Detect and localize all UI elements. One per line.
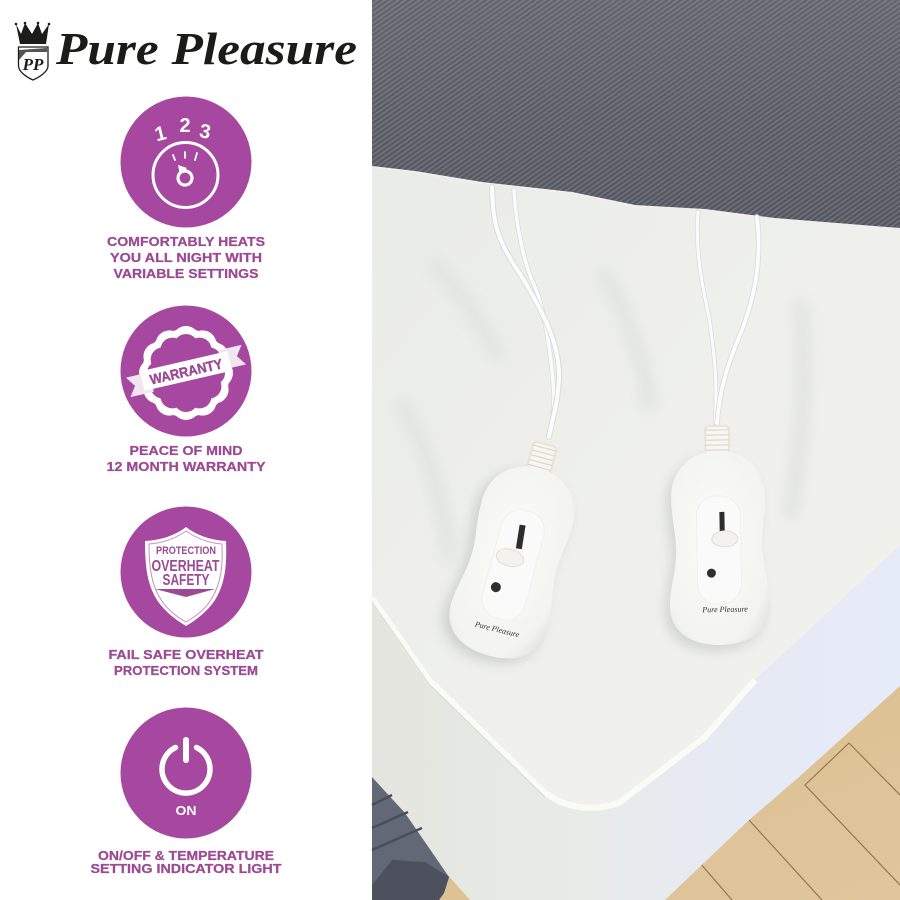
caption: ON/OFF & TEMPERATURE xyxy=(98,848,274,863)
controller logo: Pure Pleasure xyxy=(701,605,748,614)
grey denim blanket xyxy=(372,0,900,229)
feature: variable heat settings xyxy=(107,96,265,281)
feature: overheat protection xyxy=(108,506,264,678)
feature: on/off indicator xyxy=(90,708,282,876)
icon: protection shield: PROTECTION xyxy=(156,545,216,557)
slider slot xyxy=(477,505,549,625)
slider slot xyxy=(696,496,742,604)
caption: FAIL SAFE OVERHEAT xyxy=(108,647,264,662)
icon: warranty seal and ribbon: WARRANTY xyxy=(148,355,225,388)
caption: PROTECTION SYSTEM xyxy=(114,663,258,678)
feature: warranty xyxy=(106,306,266,474)
icon: dial with 1 2 3 settings: 3 xyxy=(198,120,212,144)
caption xyxy=(108,647,264,678)
white heated blanket xyxy=(372,167,900,808)
icon: dial with 1 2 3 settings xyxy=(120,96,252,228)
caption xyxy=(90,848,282,876)
icon: protection shield xyxy=(120,506,252,638)
logo: Pure Pleasure xyxy=(15,22,357,80)
controller cords xyxy=(492,187,759,437)
icon: power button: ON xyxy=(176,803,196,818)
icon: dial with 1 2 3 settings: 1 xyxy=(152,122,169,146)
mattress pad xyxy=(372,530,900,900)
photo: heated blanket with two controllers xyxy=(372,0,900,900)
wordmark: Pure Pleasure xyxy=(55,24,357,74)
icon: warranty seal and ribbon xyxy=(120,306,252,436)
caption: 12 MONTH WARRANTY xyxy=(106,459,266,474)
icon: crown and shield crest xyxy=(15,22,50,80)
caption: YOU ALL NIGHT WITH xyxy=(110,250,262,265)
left white panel xyxy=(0,0,372,900)
rug xyxy=(372,777,449,900)
controller logo: Pure Pleasure xyxy=(473,619,521,639)
caption: VARIABLE SETTINGS xyxy=(114,266,259,281)
icon: dial with 1 2 3 settings: 2 xyxy=(179,115,191,137)
icon: crown and shield crest: PP xyxy=(22,55,44,74)
right controller xyxy=(662,425,771,652)
caption xyxy=(107,234,265,281)
caption: PEACE OF MIND xyxy=(130,443,242,458)
wooden floor xyxy=(372,680,900,900)
icon: protection shield: OVERHEAT xyxy=(152,558,220,575)
icon: power button xyxy=(120,708,252,838)
caption: COMFORTABLY HEATS xyxy=(107,234,265,249)
icon: protection shield: SAFETY xyxy=(162,572,210,589)
left controller xyxy=(434,430,594,674)
caption: SETTING INDICATOR LIGHT xyxy=(90,861,282,876)
caption xyxy=(106,443,266,474)
